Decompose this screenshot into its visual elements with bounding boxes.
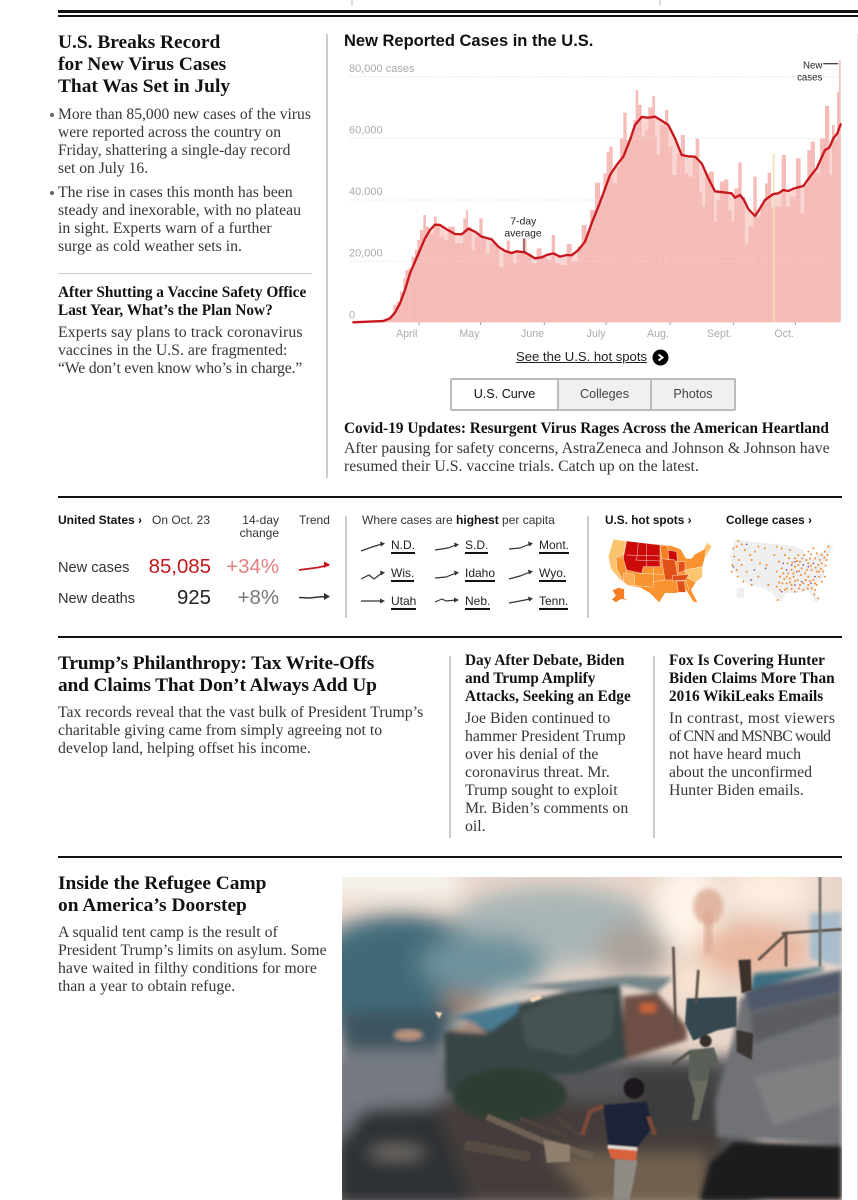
debate summary: hammer President Trump: [465, 728, 626, 745]
Trump philanthropy headline: and Claims That Don’t Always Add Up: [58, 675, 377, 696]
state: Idaho: Idaho: [465, 566, 495, 580]
pale area beneath the average: [353, 117, 841, 322]
state: Wyo.: Wyo.: [539, 566, 566, 580]
annotation: new cases: [797, 61, 838, 84]
debate headline: Attacks, Seeking an Edge: [465, 688, 631, 705]
tab: Photos: Photos: [673, 387, 713, 401]
link: see the U.S. hot spots: See the U.S. hot spots: [516, 349, 647, 364]
refugee camp summary: have waited in filthy conditions for more: [58, 960, 317, 977]
new cases value: 85,085: [149, 556, 211, 578]
lead headline: U.S. Breaks Record: [58, 32, 220, 53]
annotation: new cases: cases: [797, 73, 822, 84]
icon: cases trend: [298, 562, 330, 571]
y axis labels: 20,000: [349, 248, 383, 260]
tabs: [450, 378, 736, 411]
central tent: [443, 912, 842, 1200]
Trump philanthropy headline: [58, 653, 377, 696]
x axis labels: Sept.: [707, 328, 732, 340]
panel: lead story: [50, 32, 312, 377]
vaccine safety headline: Last Year, What’s the Plan Now?: [58, 302, 273, 319]
state: Utah: Utah: [391, 594, 416, 608]
new deaths change: +8%: [238, 587, 279, 609]
refugee camp headline: Inside the Refugee Camp: [58, 873, 266, 894]
state: S.D.: S.D.: [465, 538, 488, 552]
x axis labels: [396, 328, 794, 340]
logs: [487, 1117, 593, 1157]
vaccine safety summary: “We don’t even know who’s in charge.”: [58, 360, 302, 377]
y axis labels: 40,000: [349, 186, 383, 198]
debate summary: oil.: [465, 818, 486, 835]
refugee camp summary: than a year to obtain refuge.: [58, 978, 235, 995]
debate headline: and Trump Amplify: [465, 670, 595, 687]
daily case bars: [353, 60, 841, 322]
right page edge line: [856, 34, 858, 1200]
chart title: New Reported Cases in the U.S.: [344, 32, 593, 50]
bullet one: More than 85,000 new cases of the virus: [58, 106, 311, 123]
annotation: 7-day average: average: [504, 228, 542, 239]
story: Trump philanthropy: [58, 653, 423, 757]
refugee camp headline: [58, 873, 266, 916]
vaccine safety headline: After Shutting a Vaccine Safety Office: [58, 284, 306, 301]
Fox summary: [669, 710, 835, 799]
bullet two: [50, 184, 301, 255]
hanging laundry: [685, 997, 737, 1041]
Trump philanthropy summary: charitable giving came from simply agreeing not to: [58, 722, 382, 739]
change heading: [240, 513, 279, 540]
chart: new reported cases: [349, 60, 842, 340]
bushes: [453, 1068, 567, 1122]
tab: Colleges: Colleges: [580, 387, 629, 401]
debate summary: Trump sought to exploit: [465, 782, 618, 799]
vaccine safety headline: [58, 284, 306, 319]
right tent: [715, 973, 842, 1145]
Fox summary: Hunter Biden emails.: [669, 782, 804, 799]
covid updates summary: After pausing for safety concerns, AstraZeneca and Johnson & Johnson have: [344, 440, 830, 457]
state: Mont.: Mont.: [539, 538, 569, 552]
bullet two: The rise in cases this month has been: [58, 184, 293, 201]
bullet two: surge as cold weather sets in.: [58, 238, 242, 255]
building: [810, 912, 842, 967]
y axis labels: [349, 63, 415, 322]
Fox summary: about the unconfirmed: [669, 764, 812, 781]
per capita heading: Where cases are highest per capita: [362, 513, 555, 527]
debate summary: over his denial of the: [465, 746, 598, 763]
debate headline: Day After Debate, Biden: [465, 652, 624, 669]
covid updates story: [344, 420, 830, 475]
new deaths label: New deaths: [58, 591, 135, 607]
annotation: 7-day average: [504, 217, 542, 252]
refugee camp summary: [58, 924, 327, 995]
story: refugee camp: [58, 873, 327, 995]
lead headline: [58, 32, 230, 97]
bullet one: [50, 106, 311, 177]
story: day after debate: [465, 652, 631, 835]
photo: boys running through smoky refugee camp: [342, 877, 842, 1200]
covid updates headline: Covid-19 Updates: Resurgent Virus Rages Across the American Heartland: [344, 420, 829, 437]
foreground running boy: [624, 1078, 644, 1099]
annotation: 7-day average: 7-day: [510, 217, 537, 228]
bullet two: in sight. Experts warn of a further: [58, 220, 272, 237]
Fox summary: In contrast, most viewers: [669, 710, 835, 727]
sky and smoke: [342, 877, 814, 1041]
distant running boy: [700, 1035, 712, 1047]
Trump philanthropy summary: Tax records reveal that the vast bulk of President Trump’s: [58, 704, 423, 721]
Trump philanthropy headline: Trump’s Philanthropy: Tax Write-Offs: [58, 653, 374, 674]
Trump philanthropy summary: [58, 704, 423, 757]
refugee camp summary: A squalid tent camp is the result of: [58, 924, 278, 941]
bullet one: were reported across the country on: [58, 124, 281, 141]
poles: [673, 929, 842, 1030]
refugee camp summary: President Trump’s limits on asylum. Some: [58, 942, 327, 959]
state: Neb.: Neb.: [465, 594, 490, 608]
debate summary: coronavirus threat. Mr.: [465, 764, 610, 781]
new cases change: +34%: [226, 556, 279, 578]
lead headline: That Was Set in July: [58, 76, 230, 97]
United States link: United States ›: [58, 513, 142, 527]
map: U.S. hot spots: [608, 539, 712, 602]
Trump philanthropy summary: develop land, helping offset his income.: [58, 740, 311, 757]
lead headline: for New Virus Cases: [58, 54, 226, 75]
y axis labels: 0: [349, 310, 355, 322]
x axis labels: July: [587, 328, 606, 340]
change heading: 14-day: [242, 513, 279, 527]
x axis labels: April: [396, 328, 417, 340]
college cases link: College cases ›: [726, 513, 812, 527]
state: N.D.: N.D.: [391, 538, 415, 552]
vaccine safety summary: [58, 324, 303, 377]
debate summary: [465, 710, 628, 835]
Fox headline: 2016 WikiLeaks Emails: [669, 688, 823, 705]
change heading: change: [240, 526, 279, 540]
palm silhouette: [693, 888, 723, 925]
map: college cases: [730, 540, 833, 602]
covid updates summary: [344, 440, 830, 475]
state: Tenn.: Tenn.: [539, 594, 568, 608]
new deaths value: 925: [177, 587, 211, 609]
date heading: On Oct. 23: [152, 513, 210, 527]
7-day average line: [353, 117, 841, 322]
trend heading: Trend: [299, 513, 330, 527]
panel: states with highest per capita cases: [360, 513, 569, 610]
pale light highlights: [435, 995, 542, 1019]
y axis labels: 60,000: [349, 124, 383, 136]
x axis labels: Aug.: [647, 328, 669, 340]
tab: U.S. Curve: [452, 380, 559, 409]
icon: deaths trend: [299, 593, 330, 600]
x axis labels: Oct.: [774, 328, 794, 340]
bullet one: set on July 16.: [58, 160, 148, 177]
new cases label: New cases: [58, 560, 129, 576]
y axis labels: 80,000 cases: [349, 63, 415, 75]
x axis labels: May: [459, 328, 480, 340]
covid updates summary: resumed their U.S. vaccine trials. Catch up on the latest.: [344, 458, 699, 475]
masthead double rule: [58, 0, 858, 17]
state: Wis.: Wis.: [391, 566, 414, 580]
bullet two: steady and inexorable, with no plateau: [58, 202, 301, 219]
x axis labels: June: [521, 328, 544, 340]
vaccine safety summary: vaccines in the U.S. are fragmented:: [58, 342, 287, 359]
Fox headline: [669, 652, 835, 705]
debate summary: Mr. Biden’s comments on: [465, 800, 628, 817]
bullet one: Friday, shattering a single-day record: [58, 142, 290, 159]
ground: [333, 1010, 757, 1200]
tab: U.S. Curve: U.S. Curve: [474, 387, 535, 401]
tab: Colleges: [559, 380, 652, 409]
debate headline: [465, 652, 631, 705]
Fox headline: Biden Claims More Than: [669, 670, 835, 687]
vaccine safety summary: Experts say plans to track coronavirus: [58, 324, 303, 341]
Fox summary: not have heard much: [669, 746, 801, 763]
hot spots link: U.S. hot spots ›: [605, 513, 692, 527]
story: Fox and Hunter Biden: [669, 652, 835, 799]
annotation: new cases: New: [803, 61, 822, 72]
panel: national statistics table: [58, 513, 330, 609]
state trend sparklines: [360, 542, 533, 604]
debate summary: Joe Biden continued to: [465, 710, 610, 727]
Fox summary: of CNN and MSNBC would: [669, 728, 830, 745]
refugee camp headline: on America’s Doorstep: [58, 895, 247, 916]
Fox headline: Fox Is Covering Hunter: [669, 652, 825, 669]
